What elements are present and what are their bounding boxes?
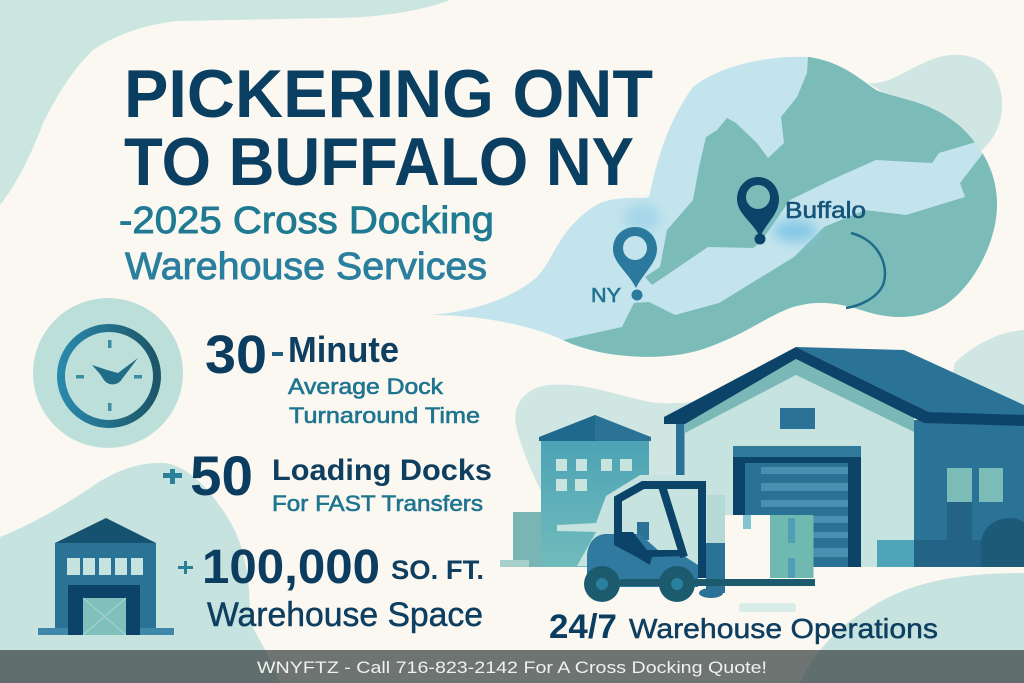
- stat: 50 loading docks: Loading Docks: [272, 454, 492, 487]
- forklift: wheels: [584, 566, 620, 602]
- background blob: top left: [0, 0, 450, 205]
- illustration: main warehouse: [664, 347, 1024, 567]
- warehouse: side windows: [947, 468, 1003, 502]
- forklift: pale halo behind cab: [557, 475, 726, 566]
- forklift: steering: [637, 522, 649, 540]
- label: NY: NY: [591, 285, 621, 307]
- forklift: carriage: [706, 543, 725, 593]
- forklift: seat: [614, 532, 686, 565]
- stat: 100,000 sq ft: Warehouse Space: [207, 596, 483, 634]
- stat: 50 loading docks: [163, 444, 492, 516]
- warehouse: side door arch: [981, 518, 1024, 567]
- stat: 30-minute: [205, 325, 480, 428]
- stat: 50 loading docks: 50: [190, 444, 253, 507]
- subtitle: -2025 Cross Docking: [119, 200, 494, 242]
- map: water silhouette: [430, 57, 997, 357]
- pin: NY: [613, 227, 657, 300]
- warehouse: small teal block: [877, 540, 914, 567]
- warehouse: dock door: [733, 446, 861, 567]
- warehouse: roof: [796, 347, 1024, 417]
- map: water glow near NY: [624, 204, 660, 232]
- background blob: bottom right: [800, 573, 1024, 683]
- footer bar: WNYFTZ - Call 716-823-2142 For A Cross Docking Quote!: [257, 658, 767, 677]
- stat: 50 loading docks: For FAST Transfers: [272, 491, 483, 516]
- caption: 24/7 warehouse operations: Warehouse Operations: [629, 613, 938, 644]
- background blob: behind warehouse: [515, 385, 720, 567]
- icon: small warehouse: [38, 518, 174, 635]
- label: Buffalo: Buffalo: [785, 197, 866, 223]
- background blob: bottom left: [0, 463, 280, 683]
- title: [124, 56, 653, 200]
- stat: 100,000 sq ft: [178, 541, 484, 634]
- boxes: [725, 515, 814, 578]
- stat: 30-minute: Turnaround Time: [289, 403, 480, 428]
- stat: 30-minute: 30: [205, 325, 267, 385]
- stat: 30-minute: Average Dock: [288, 374, 444, 399]
- warehouse: vent: [780, 408, 815, 429]
- caption: 24/7 warehouse operations: 24/7: [549, 608, 617, 646]
- stat: 30-minute: Minute: [288, 329, 399, 370]
- map: water glow near Buffalo: [773, 220, 817, 242]
- warehouse: front wall: [685, 375, 914, 567]
- ground smudge: [739, 603, 796, 612]
- warehouse: right side wall: [914, 420, 1024, 567]
- forklift: cab frame: [618, 485, 702, 578]
- illustration: left office building: [500, 415, 651, 567]
- forklift: fork: [620, 579, 815, 586]
- illustration: forklift and boxes: [557, 475, 815, 602]
- stat: 100,000 sq ft: SO. FT.: [391, 555, 484, 585]
- forklift: pale smudge behind mast: [707, 495, 725, 543]
- title: TO BUFFALO NY: [124, 124, 634, 200]
- caption: 24/7 warehouse operations: [549, 608, 938, 646]
- icon: clock: [33, 298, 183, 448]
- pin: Buffalo: [737, 177, 779, 244]
- stat: 100,000 sq ft: 100,000: [202, 541, 380, 594]
- subtitle: Warehouse Services: [125, 246, 487, 288]
- warehouse: lower dark wall: [914, 540, 1024, 567]
- map: [430, 40, 1010, 370]
- warehouse: downspout: [676, 424, 684, 475]
- map: route arc: [846, 233, 885, 308]
- forklift: body: [587, 534, 698, 587]
- map: pale back blob: [868, 55, 1002, 152]
- background blob: right middle: [940, 330, 1024, 430]
- title: PICKERING ONT: [124, 56, 653, 132]
- footer bar: [0, 650, 1024, 683]
- map: land masses: [563, 56, 997, 357]
- subtitle: [119, 200, 494, 288]
